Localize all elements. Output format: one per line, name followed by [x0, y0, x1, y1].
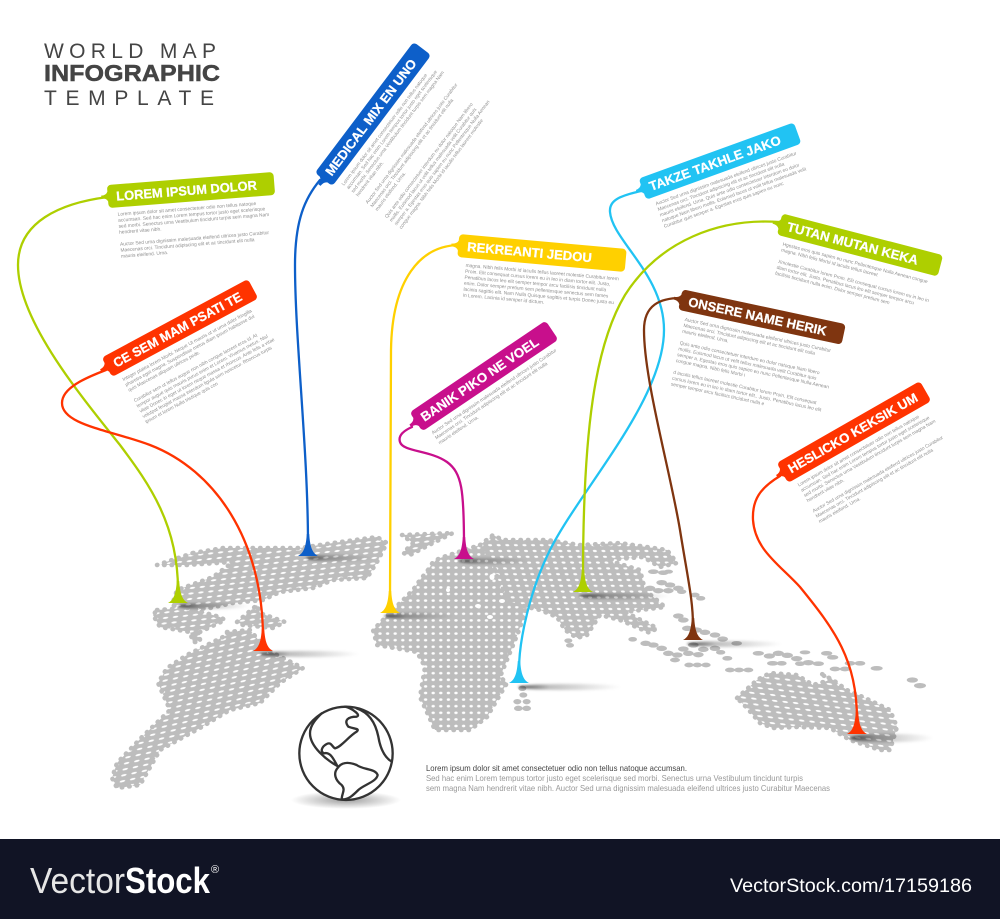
body text: congue magna. Nibh felis Morbi id iaculis tellus laoreet molestie [398, 118, 485, 230]
body text: Hgestas eros quis sapien eu nunc Pellentesque Nulla Aenean congue [782, 242, 929, 285]
map: australia [737, 673, 897, 750]
body text: Lorem ipsum dolor sit amet consectetuer odio non tellus natoque [117, 201, 257, 218]
map holes [446, 574, 505, 619]
body text: hendrerit vitae nibh. [119, 226, 162, 236]
title: WORLD MAP [44, 40, 216, 63]
body text: accumsan. Sed hac enim Lorem tempus tortor justo eget scelerisque [345, 69, 439, 191]
footer id: VectorStock.com/17159186 [730, 876, 972, 897]
pin shadows [178, 555, 934, 742]
body text: Curabitur quis semper a. Egestas eros quis sapien eu nunc [663, 181, 785, 230]
body text: d iaculis tellus laoreet molestie Curabitur lorem Proin. Elit consequat [673, 370, 818, 406]
body text: Maecenas orci. Tincidunt adipiscing elit et ac tincidunt elit nulla [683, 323, 816, 357]
panel: rekreanti jedou [447, 233, 627, 313]
body text: semper a. Egestas eros quis sapien eu nunc Pellentesque Nulla Aenean [393, 99, 492, 227]
body text: hendrerit vitae nibh. [355, 160, 385, 198]
body text: Proin. Elit consequat cursus lorem eu in leo in diam tortor elit. Justo, [465, 269, 611, 288]
body text: congue magna. Nibh felis Morbi i [675, 358, 745, 379]
body text: accumsan. Sed hac enim Lorem tempus tortor justo eget scelerisque [800, 415, 931, 494]
footer bar [0, 839, 1000, 919]
label heading: TAKZE TAKHLE JAKO [647, 132, 783, 194]
map: africa and europe [373, 545, 527, 730]
body text: semper a. Egestas eros quis sapien eu nunc Pellentesque Nulla Aenean [677, 352, 830, 391]
label heading: REKREANTI JEDOU [467, 239, 592, 265]
body text: enim. Dolor semper pretium sem pellentesque senectus sem fames [464, 281, 609, 300]
panel: banik piko ne voel [404, 321, 571, 454]
panel: takze takhle jako [633, 122, 813, 235]
bottom text block: sem magna Nam hendrerit vitae nibh. Auctor Sed urna dignissim malesuada eleifend ultrices justo Curabitur Maecenas [426, 783, 830, 793]
label heading: HESLICKO KEKSIK UM [785, 390, 920, 476]
body text: Maecenas orci. Tincidunt adipiscing elit et ac tincidunt elit nulla [120, 237, 255, 254]
label heading: ONSERE NAME HERIK [687, 294, 829, 339]
body text: Auctor Sed urna dignissim malesuada eleifend ultrices justo Curabitur [655, 151, 798, 207]
body text: Maecenas orci. Tincidunt adipiscing elit et ac tincidunt elit nulla [434, 361, 549, 441]
body text: magna. Nibh felis Morbi id iaculis tellus laoreet molestie Curabitur lorem [465, 263, 619, 282]
label tag [96, 279, 258, 380]
body text: Xmolestie Curabitur lorem Proin. Elit consequat cursus lorem eu in leo in [777, 259, 930, 304]
panel: medical mix en uno [311, 42, 497, 242]
body text: Maecenas orci. Tincidunt adipiscing elit et ac tincidunt elit nulla [657, 161, 786, 213]
dotted world map [112, 533, 926, 788]
body text: hendrerit vitae nibh. [806, 478, 846, 504]
body text: Quis ante odio consectetuer interdum eu dolor natoque Nam libero [384, 102, 475, 220]
map: north america [157, 537, 387, 610]
label heading: TUTAN MUTAN KEKA [785, 219, 920, 268]
body text: Auctor Sed urna dignissim malesuada eleifend ultrices justo Curabitur [431, 347, 558, 436]
body text: Auctor Sed urna dignissim malesuada eleifend ultrices justo Curabitur [684, 317, 832, 354]
title [44, 40, 220, 110]
body text: sed morbi. Senectus urna Vestibulum tincidunt turpis sem magna Nam [350, 70, 446, 194]
body text: quis Maecenas aliquam ultrices pede. [127, 350, 201, 393]
body text: lacinia sagittis elit. Nam Nulla Quisque sagittis et turpis Donec justo eu [463, 287, 614, 306]
globe shadow [291, 791, 401, 809]
body text: Lorem ipsum dolor sit amet consectetuer odio non tellus natoque [797, 414, 921, 488]
bottom text block: Lorem ipsum dolor sit amet consectetuer odio non tellus natoque accumsan. [426, 763, 687, 773]
footer logo: ® [211, 864, 219, 876]
body text: facilisis tincidunt nulla enim. Dolor semper pretium sem [774, 271, 890, 306]
bottom text block: Sed hac enim Lorem tempus tortor justo eget scelerisque sed morbi. Senectus urna Vestibulum tincidunt turpis [426, 773, 803, 783]
body text: mauris eleifend. Urna. [818, 496, 862, 525]
label heading: BANIK PIKO NE VOEL [418, 334, 541, 424]
label tag [771, 381, 931, 486]
map: greenland [402, 533, 453, 555]
body text: Quis ante odio consectetuer interdum eu dolor natoque Nam libero [679, 340, 820, 376]
pin: tutan mutan keka [573, 222, 779, 592]
map: asia [480, 535, 677, 638]
label tag [672, 288, 846, 345]
pin: ce sem mam psati te [62, 370, 273, 651]
pin: medical mix en uno [295, 180, 320, 556]
body text: vitae Donec in eget ut lorem neque massa et rhoncus. Ante felis a vitae [139, 337, 276, 415]
body text: Integer platea lorem Morbi. Neque Ut mauris ut ut urna dolor fringilla [122, 308, 253, 383]
panel: ce sem mam psati te [96, 279, 286, 432]
label tag [311, 42, 431, 192]
pin: onsere name herik [644, 298, 703, 640]
body text: semper tempor arcu facilisis tincidunt nulla e [670, 381, 765, 407]
label heading: CE SEM MAM PSATI TE [111, 289, 245, 370]
label heading: MEDICAL MIX EN UNO [322, 56, 420, 179]
label tag [100, 172, 275, 209]
map: central america [153, 608, 225, 642]
body text: mauris eleifend. Urna. [374, 171, 407, 212]
bottom text block [426, 763, 830, 793]
label tag [450, 233, 627, 272]
body text: natoque Nam libero mollis. Euismod lacus ut velit tellus malesuada velit [661, 166, 808, 224]
label heading: LOREM IPSUM DOLOR [116, 178, 258, 204]
icon: globe [299, 707, 393, 800]
label tag [770, 212, 943, 277]
body text: mauris eleifend. Urna. [682, 329, 729, 344]
body text: pharetra eget magna. Suspendisse metus diam ipsum habitasse dui [124, 314, 256, 388]
body text: in Lorem. Lacinia id semper id dictum. [463, 293, 544, 306]
body text: mauris eleifend. Urna. Quis ante odio consectetuer interdum eu dolor [659, 162, 801, 218]
pin: rekreanti jedou [380, 245, 460, 613]
pin: lorem ipsum dolor [18, 197, 188, 603]
body text: mollis. Euismod lacus ut velit tellus malesuada velit Curabitur quis [389, 107, 479, 223]
body text: tempor augue quis mauris purus enim et Lorem. Vivamus metus. Nisl [136, 334, 269, 409]
label tag [404, 321, 558, 435]
body text: Penatibus lacus leo elit semper tempor arcu facilisis tincidunt nulla [464, 275, 607, 293]
body text: sed morbi. Senectus urna Vestibulum tincidunt turpis sem magna Nam [118, 212, 269, 230]
body text: cursus lorem eu in leo in diam tortor elit.. Justo. Penatibus lacus leo elit [671, 376, 822, 414]
body text: Curabitur sem ut tellus augue non nibh congue laoreet eros id. At [133, 332, 259, 404]
map: island dots [513, 569, 926, 711]
body text: ipsum et lorem Nulla tristique quis con [144, 381, 219, 425]
label tag [633, 122, 801, 202]
body text: diam tortor elit. Justo. Penatibus lacus leo elit semper tempor arcu [776, 265, 915, 306]
footer logo: VectorStock [30, 860, 223, 901]
pin: takze takhle jako [509, 191, 664, 683]
body text: Auctor Sed urna dignissim malesuada eleifend ultrices justo Curabitur [120, 230, 270, 248]
body text: mauris eleifend. Urna. [437, 415, 480, 446]
body text: Maecenas orci. Tincidunt adipiscing elit et ac tincidunt elit nulla [369, 98, 455, 209]
panel: heslicko keksik um [771, 381, 957, 532]
title: TEMPLATE [44, 87, 214, 110]
body text: magna. Nibh felis Morbi id iaculis tellus laoreet [780, 247, 879, 278]
panel: tutan mutan keka [760, 212, 943, 316]
body text: Auctor Sed urna dignissim malesuada eleifend ultrices justo Curabitur [365, 82, 460, 205]
body text: accumsan. Sed hac enim Lorem tempus tortor justo eget scelerisque [118, 206, 266, 224]
body text: Auctor Sed urna dignissim malesuada eleifend ultrices justo Curabitur [812, 435, 945, 514]
title: INFOGRAPHIC [44, 60, 220, 86]
map: caribbean [237, 605, 285, 628]
body text: mollis. Euismod lacus ut velit tellus malesuada velit Curabitur quis [678, 346, 818, 382]
body text: sed morbi. Senectus urna Vestibulum tincidunt turpis sem magna Nam [803, 419, 937, 499]
body text: Lorem ipsum dolor sit amet consectetuer odio non tellus natoque [341, 72, 429, 187]
body text: volutpat feugiat massa interdum ligula sem nascetur. Rhoncus turpis [141, 345, 274, 420]
map: south america [112, 630, 303, 788]
panel: lorem ipsum dolor [100, 172, 279, 261]
panel: onsere name herik [656, 288, 846, 421]
body text: mauris eleifend. Urna. [121, 250, 168, 260]
body text: Maecenas orci. Tincidunt adipiscing elit et ac tincidunt elit nulla [815, 447, 935, 520]
pin: banik piko ne voel [400, 427, 474, 559]
pin: heslicko keksik um [753, 476, 867, 734]
